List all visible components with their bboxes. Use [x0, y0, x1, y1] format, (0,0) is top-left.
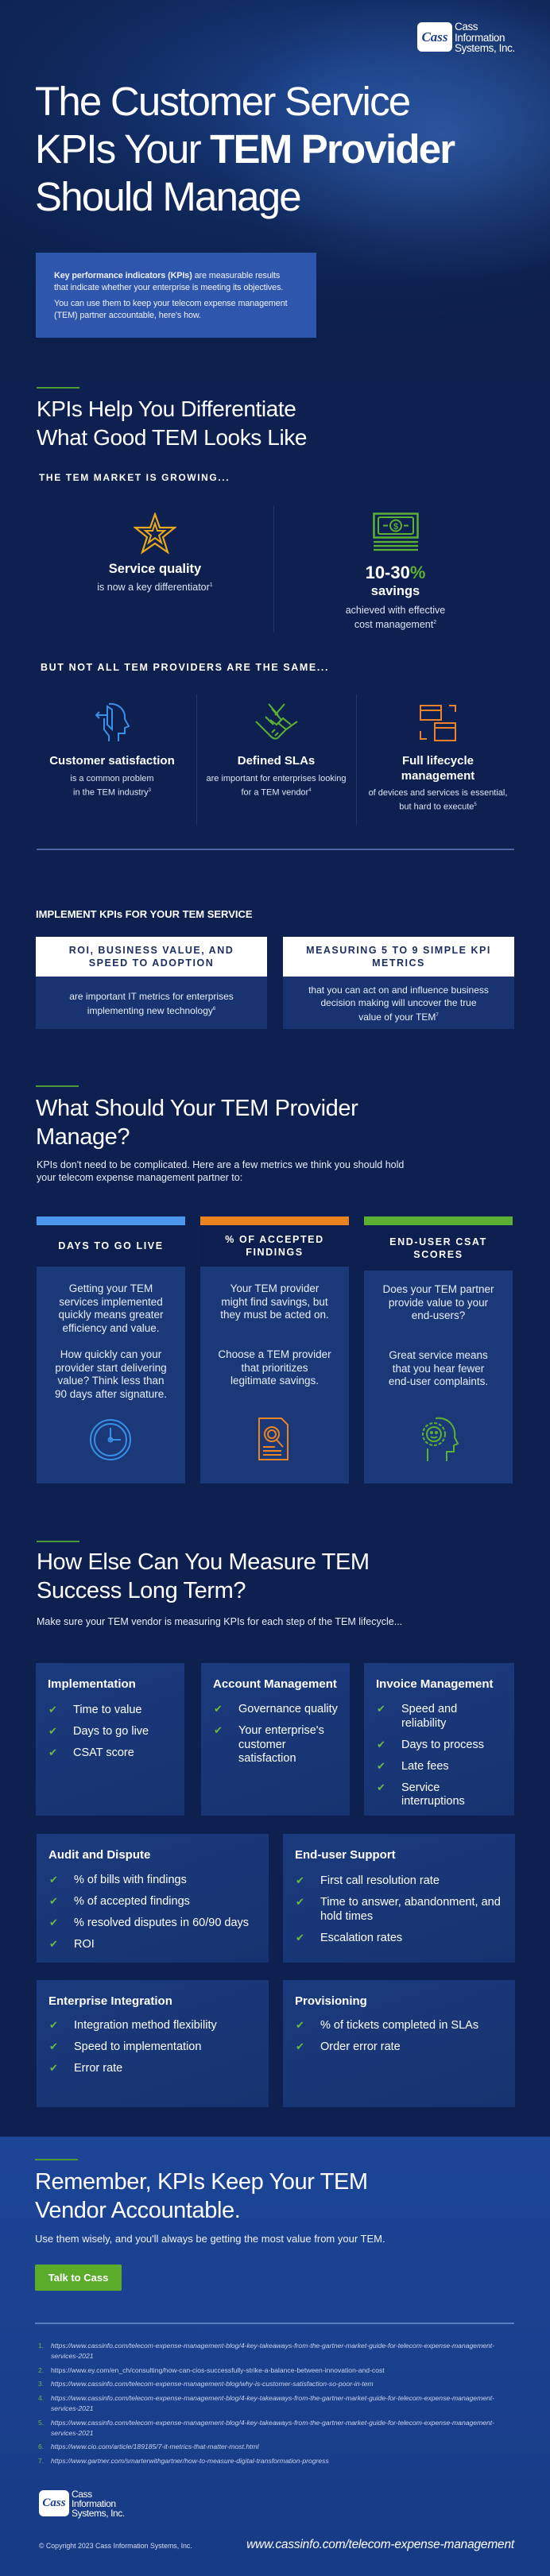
- panel: provisioning: % of tickets completed in SLAs: [320, 2019, 478, 2032]
- panel: end-user support: Time to answer, abandonment, and hold times: [320, 1896, 501, 1923]
- stat: savings: [346, 512, 445, 630]
- url: www.cassinfo.com/telecom-expense-management: [246, 2538, 514, 2551]
- text: use them: Use them wisely, and you'll always be getting the most value from your TEM.: [35, 2233, 385, 2245]
- panel: end-user support: [283, 1834, 515, 1963]
- item: full lifecycle: management: [401, 769, 474, 783]
- panel: measuring: [283, 937, 514, 1029]
- text: intro: KPIs don't need to be complicated. Here are a few metrics we think you should hold: [37, 1159, 404, 1170]
- logo: top: Systems, Inc.: [455, 42, 515, 54]
- heading: how else: How Else Can You Measure TEM: [37, 1549, 370, 1575]
- panel: enterprise integration: Speed to implementation: [74, 2040, 201, 2053]
- references: 3.: [38, 2380, 44, 2388]
- panel: invoice management: Late fees: [401, 1759, 449, 1772]
- panel: enterprise integration: Error rate: [74, 2062, 122, 2075]
- logo: top: Cass: [421, 29, 448, 44]
- panel: invoice management: Days to process: [401, 1739, 484, 1751]
- icon: clock: [90, 1419, 131, 1460]
- copyright: © Copyright 2023 Cass Information Systems, Inc.: [39, 2542, 192, 2550]
- card: days to go live: DAYS TO GO LIVE: [58, 1240, 164, 1251]
- icon: handshake: [255, 703, 297, 740]
- stat: savings: savings: [371, 584, 420, 598]
- item: customer satisfaction: is a common problem: [70, 774, 154, 783]
- text: make sure: Make sure your TEM vendor is measuring KPIs for each step of the TEM lifecycle...: [37, 1616, 402, 1627]
- stat: service quality: is now a key differentiator1: [97, 582, 213, 593]
- item: customer satisfaction: [49, 702, 175, 797]
- card: accepted findings: FINDINGS: [246, 1247, 304, 1258]
- panel: measuring: METRICS: [372, 957, 425, 969]
- card: CSAT: [364, 1216, 513, 1483]
- heading: how else: Success Long Term?: [37, 1578, 246, 1603]
- stat: savings: 10-30%: [366, 563, 425, 582]
- references: https://www.cassinfo.com/telecom-expense-management-blog/why-is-customer-satisfaction-so-poor-in-tem: [51, 2380, 374, 2388]
- stat: service quality: Service quality: [109, 562, 201, 576]
- references: 7.: [38, 2457, 44, 2465]
- card: CSAT: END-USER CSAT: [389, 1236, 487, 1247]
- heading: KPIs help: What Good TEM Looks Like: [37, 425, 307, 450]
- item: customer satisfaction: in the TEM industry3: [73, 787, 151, 797]
- panel: account management: [201, 1663, 350, 1816]
- panel: audit: % of accepted findings: [74, 1895, 190, 1908]
- card: CSAT: Great service means that you hear fewer end-user complaints.: [389, 1349, 488, 1387]
- icon: folders: [420, 705, 456, 741]
- references: 6.: [38, 2443, 44, 2450]
- panel: implementation: [36, 1663, 184, 1816]
- heading: remember: Vendor Accountable.: [35, 2198, 240, 2223]
- panel: implementation: CSAT score: [73, 1746, 134, 1759]
- panel: audit: [37, 1834, 269, 1963]
- references: [38, 2342, 494, 2465]
- subheading: implement KPIs: IMPLEMENT KPIs FOR YOUR TEM SERVICE: [36, 908, 253, 920]
- references: services-2021: [51, 2404, 94, 2412]
- intro box: [36, 253, 316, 338]
- item: full lifecycle: Full lifecycle: [402, 754, 474, 768]
- title: KPIs Your TEM Provider: [35, 126, 454, 172]
- panel: measuring: decision making will uncover the true: [320, 997, 477, 1008]
- subheading: market growing: THE TEM MARKET IS GROWING...: [39, 472, 230, 483]
- panel: measuring: MEASURING 5 TO 9 SIMPLE KPI: [306, 945, 491, 956]
- hero background: [0, 0, 550, 381]
- references: https://www.gartner.com/smarterwithgartner/how-to-measure-digital-transformation-progress: [51, 2457, 329, 2465]
- panel: invoice management: Service interruptions: [401, 1781, 465, 1808]
- intro box: (TEM) partner accountable, here's how.: [54, 311, 201, 320]
- stat: service quality: [97, 512, 213, 593]
- icon: happy head: [422, 1418, 459, 1461]
- panel: enterprise integration: Enterprise Integration: [48, 1994, 172, 2008]
- title: The Customer Service: [35, 79, 409, 124]
- icon: money: [373, 512, 419, 551]
- heading: what should: What Should Your TEM Provider: [36, 1096, 358, 1121]
- text: intro: your telecom expense management partner to:: [37, 1172, 242, 1183]
- panel: end-user support: End-user Support: [295, 1848, 396, 1862]
- logo: footer: Information: [72, 2498, 116, 2509]
- logo: top: [417, 21, 515, 54]
- references: 1.: [38, 2342, 44, 2350]
- logo: top: Information: [455, 32, 505, 43]
- panel: implementation: Days to go live: [73, 1725, 149, 1738]
- panel: enterprise integration: [37, 1980, 269, 2107]
- references: services-2021: [51, 2429, 94, 2437]
- subheading: not all providers: BUT NOT ALL TEM PROVIDERS ARE THE SAME...: [41, 662, 329, 673]
- references: 5.: [38, 2419, 44, 2427]
- references: https://www.cassinfo.com/telecom-expense-management-blog/4-key-takeaways-from-the-gartner-market-guide-for-telecom-expense-management-: [51, 2394, 494, 2402]
- icon: money: $: [393, 522, 398, 532]
- panel: implementation: Time to value: [73, 1704, 141, 1716]
- item: defined SLAs: Defined SLAs: [238, 754, 315, 768]
- references: https://www.ey.com/en_ch/consulting/how-can-cios-successfully-strike-a-balance-between-innovation-and-cost: [51, 2366, 385, 2374]
- references: https://www.cassinfo.com/telecom-expense-management-blog/4-key-takeaways-from-the-gartner-market-guide-for-telecom-expense-management-: [51, 2419, 494, 2427]
- panel: account management: customer: [238, 1739, 286, 1751]
- heading: what should: Manage?: [36, 1124, 130, 1150]
- logo: footer: Systems, Inc.: [72, 2508, 125, 2519]
- stat: savings: cost management2: [354, 619, 436, 630]
- item: full lifecycle: but hard to execute5: [399, 802, 477, 811]
- panel: enterprise integration: Integration method flexibility: [74, 2019, 217, 2032]
- panel: invoice management: Speed and reliability: [401, 1703, 457, 1729]
- button: talk to cass: Talk to Cass: [48, 2272, 108, 2284]
- text: intro: [37, 1159, 404, 1183]
- panel: account management: Account Management: [213, 1677, 337, 1691]
- card: CSAT: Does your TEM partner provide value to your end-users?: [382, 1283, 494, 1321]
- title: Should Manage: [35, 174, 300, 219]
- icon: document search: [258, 1418, 289, 1460]
- item: full lifecycle: of devices and services is essential,: [369, 788, 507, 798]
- panel: provisioning: [283, 1980, 515, 2107]
- heading: KPIs help: [37, 396, 307, 450]
- item: defined SLAs: [206, 703, 347, 797]
- item: defined SLAs: for a TEM vendor4: [241, 787, 312, 797]
- button: talk to cass: [35, 2265, 122, 2291]
- references: https://www.cio.com/article/189185/7-it-metrics-that-matter-most.html: [51, 2443, 259, 2450]
- references: services-2021: [51, 2352, 94, 2360]
- references: 4.: [38, 2394, 44, 2402]
- item: full lifecycle: [369, 705, 507, 811]
- panel: audit: Audit and Dispute: [48, 1848, 150, 1862]
- panel: audit: % resolved disputes in 60/90 days: [74, 1917, 249, 1929]
- card: days to go live: Getting your TEM services implemented quickly means greater efficiency and value.: [58, 1282, 164, 1334]
- panel: invoice management: [364, 1663, 514, 1816]
- card: accepted findings: % OF ACCEPTED: [225, 1234, 324, 1245]
- item: defined SLAs: are important for enterprises looking: [206, 774, 347, 783]
- references: https://www.cassinfo.com/telecom-expense-management-blog/4-key-takeaways-from-the-gartner-market-guide-for-telecom-expense-management-: [51, 2342, 494, 2350]
- panel: account management: Your enterprise's: [238, 1724, 324, 1737]
- panel: provisioning: Provisioning: [295, 1994, 367, 2008]
- logo: top: Cass: [455, 21, 478, 33]
- panel: provisioning: Order error rate: [320, 2040, 401, 2053]
- panel: audit: ROI: [74, 1938, 95, 1951]
- panel: audit: % of bills with findings: [74, 1874, 187, 1886]
- heading: what should: [36, 1096, 358, 1150]
- panel: ROI: ROI, BUSINESS VALUE, AND: [69, 945, 234, 956]
- panel: end-user support: First call resolution rate: [320, 1874, 440, 1887]
- card: accepted findings: Your TEM provider might find savings, but they must be acted on.: [220, 1282, 329, 1321]
- heading: how else: [37, 1549, 370, 1603]
- card: days to go live: How quickly can your provider start delivering value? Think less than 90 days after signature.: [55, 1348, 167, 1400]
- references: 2.: [38, 2366, 44, 2374]
- panel: ROI: [36, 937, 267, 1029]
- panel: ROI: are important IT metrics for enterprises: [69, 991, 234, 1002]
- panel: invoice management: Invoice Management: [376, 1677, 494, 1691]
- heading: remember: Remember, KPIs Keep Your TEM: [35, 2169, 368, 2195]
- panel: account management: Governance quality: [238, 1703, 338, 1715]
- item: customer satisfaction: Customer satisfaction: [49, 754, 175, 768]
- panel: implementation: Implementation: [48, 1677, 136, 1691]
- bottom section background: [0, 2137, 550, 2576]
- panel: account management: satisfaction: [238, 1752, 296, 1765]
- card: CSAT: SCORES: [413, 1249, 463, 1260]
- card: accepted findings: [200, 1216, 349, 1483]
- heading: KPIs help: KPIs Help You Differentiate: [37, 396, 296, 421]
- icon: head: [95, 702, 130, 741]
- stat: savings: achieved with effective: [346, 605, 445, 616]
- logo: footer: Cass: [42, 2497, 66, 2509]
- heading: remember: [35, 2169, 368, 2223]
- panel: ROI: SPEED TO ADOPTION: [89, 957, 214, 969]
- panel: measuring: that you can act on and influence business: [308, 984, 489, 996]
- card: accepted findings: Choose a TEM provider that prioritizes legitimate savings.: [218, 1348, 331, 1387]
- panel: ROI: implementing new technology6: [87, 1005, 215, 1016]
- icon: star: [134, 512, 176, 555]
- card: days to go live: [37, 1216, 185, 1483]
- intro box: You can use them to keep your telecom expense management: [54, 299, 288, 308]
- logo: footer: Cass: [72, 2489, 92, 2500]
- intro box: Key performance indicators (KPIs) are measurable results: [54, 271, 280, 280]
- panel: end-user support: Escalation rates: [320, 1931, 402, 1944]
- panel: measuring: value of your TEM7: [358, 1011, 439, 1023]
- logo: footer: [39, 2489, 125, 2519]
- intro box: that indicate whether your enterprise is meeting its objectives.: [54, 283, 283, 292]
- title: [35, 79, 455, 219]
